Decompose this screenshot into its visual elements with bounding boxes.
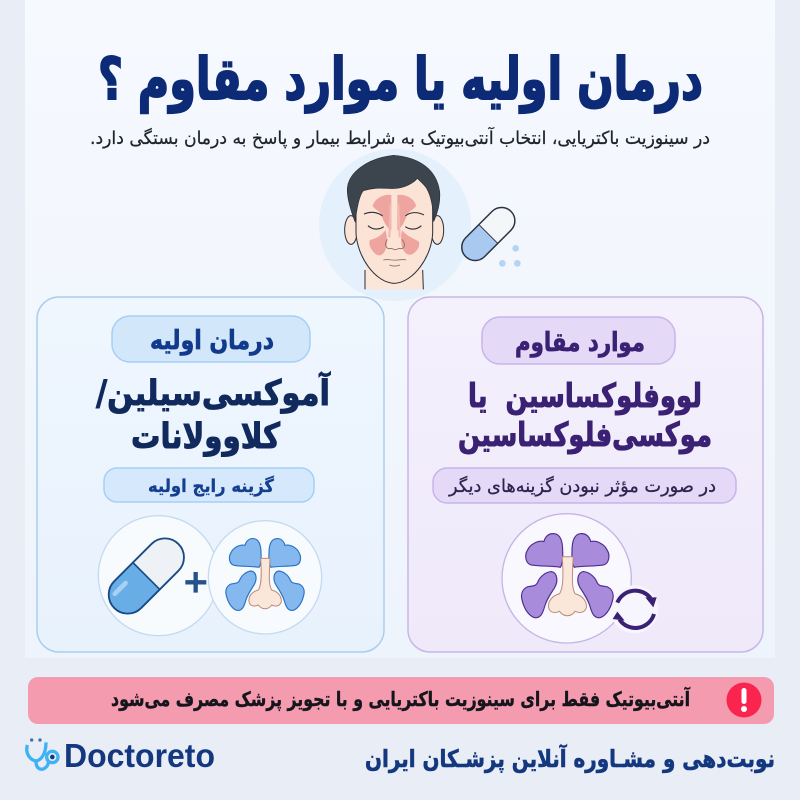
drug name: levofloxacin or moxifloxacin: لووفلوکساسین یا [468,376,702,416]
icon: capsule plus sinuses [98,516,322,636]
icon: capsule with dots [456,202,521,267]
logo: Doctoreto: Doctoreto [64,737,215,774]
icon: sinuses with resistance cycle [502,514,658,643]
icon: exclamation [726,682,762,718]
badge: first-line treatment: درمان اولیه [150,326,274,356]
note pill: common first option [104,468,314,502]
badge: resistant cases [482,317,675,364]
badge: first-line treatment [112,316,310,362]
illustration: patient face with sinuses [319,149,471,301]
panel: first-line treatment [37,297,384,652]
badge: resistant cases: موارد مقاوم [515,328,645,358]
note pill: when other options fail: در صورت مؤثر نبودن گزینه‌های دیگر [448,475,716,497]
drug name: amoxicillin clavulanate: کلاوولانات [131,417,281,457]
drug name: amoxicillin clavulanate [96,371,331,457]
subtitle: در سینوزیت باکتریایی، انتخاب آنتی‌بیوتیک به شرایط بیمار و پاسخ به درمان بستگی دارد. [90,126,710,149]
panel: resistant cases [408,297,763,652]
icon: stethoscope [27,738,58,769]
note pill: common first option: گزینه رایج اولیه [148,475,274,497]
drug name: levofloxacin or moxifloxacin [458,376,712,455]
note pill: when other options fail [433,468,736,503]
background panel [25,0,775,658]
drug name: amoxicillin clavulanate: آموکسی‌سیلین/ [96,371,331,414]
alert banner [28,677,774,724]
drug name: levofloxacin or moxifloxacin: موکسی‌فلوکساسین [458,415,712,455]
